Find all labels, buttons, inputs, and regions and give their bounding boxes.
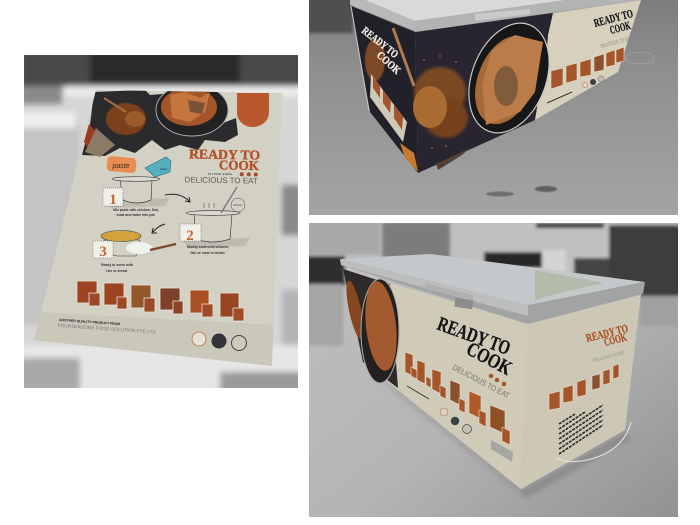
freezer floor shadow — [386, 382, 630, 498]
heading: ready to cook: DELICIOUS TO EAT — [185, 175, 258, 186]
step 3 instruction: Ready to serve with — [101, 263, 133, 267]
icon: paste packet — [106, 156, 137, 173]
icon: water jug: water — [160, 167, 167, 171]
orange tab — [237, 93, 269, 127]
dark artwork with pan — [343, 269, 401, 388]
step 1 pot — [103, 177, 170, 208]
step 1 instruction — [113, 208, 159, 217]
arrow: step 2 to 3 — [152, 224, 165, 233]
freezer end, dark side: READY TO — [359, 25, 401, 61]
heading: ready to cook: COOK — [219, 157, 260, 173]
freezer end, dark side — [351, 6, 418, 173]
step 3 bowl with rice: 3 — [99, 244, 107, 260]
step 1 instruction: Mix paste with chicken, fish, — [113, 208, 159, 212]
freezer front, cream artwork: DELICIOUS TO EAT — [600, 36, 633, 50]
blurred table background — [20, 50, 305, 395]
arrow: step 1 to 2 — [165, 194, 190, 202]
freezer end panel — [521, 294, 641, 489]
freezer long side: COOK — [463, 338, 516, 380]
freezer long side — [343, 269, 528, 489]
heading: ready to cook: READY TO — [189, 146, 260, 163]
step 3 instruction: rice or bread. — [106, 269, 128, 273]
footer pattern band — [34, 312, 274, 366]
step 2 instruction: Slowly cook until chicken, — [187, 245, 229, 249]
freezer front, cream artwork — [535, 0, 641, 120]
freezer long side: READY TO — [434, 313, 513, 360]
freezer front, dark spice artwork — [393, 13, 553, 173]
step 2 pot: 2 — [186, 228, 194, 244]
freezer long side: DELICIOUS TO EAT — [451, 363, 511, 400]
step 1 instruction: meat and water into pot. — [116, 213, 156, 217]
company credit: ANOTHER QUALITY PRODUCT FROM — [59, 318, 120, 326]
freezer end panel: COOK — [603, 332, 628, 349]
icon: water jug — [145, 157, 171, 177]
step 1 pot: 1 — [109, 192, 117, 208]
vent slots — [559, 405, 603, 454]
freezer lid — [340, 254, 645, 324]
company credit — [58, 318, 156, 334]
step 2 pot: 20 mins — [233, 203, 243, 207]
heading: ready to cook: IN 3 EASY STEPS — [208, 172, 232, 176]
panel: poster photo — [20, 50, 305, 395]
blurred room background — [305, 220, 685, 517]
poster sheet — [30, 84, 282, 370]
dark spice artwork — [82, 90, 238, 157]
step 2 instruction: fish or meat is tender. — [190, 251, 226, 255]
pan with curry — [156, 91, 228, 136]
freezer end panel: DELICIOUS TO EAT — [592, 350, 626, 364]
certification badges — [192, 332, 246, 350]
step 2 instruction — [187, 246, 229, 254]
freezer front, cream artwork: READY TO — [593, 8, 634, 30]
freezer lid — [350, 0, 641, 32]
step 3 bowl with rice — [93, 230, 176, 260]
step 2 pot — [180, 187, 250, 248]
product row — [77, 281, 244, 321]
pan with curry — [468, 22, 550, 134]
freezer end, dark side: COOK — [374, 49, 403, 77]
power cord — [556, 422, 631, 462]
freezer front, cream artwork: COOK — [609, 20, 632, 37]
heading: ready to cook — [185, 149, 260, 184]
concrete floor — [305, 0, 678, 215]
panel: freezer photo, dark front — [305, 0, 678, 215]
panel: freezer photo, cream front — [305, 220, 685, 517]
freezer end panel: READY TO — [585, 323, 629, 345]
step 3 instruction — [101, 264, 133, 272]
company credit: FOURSEASONS FOOD SOLUTION PTE LTD — [57, 323, 157, 336]
icon: paste packet: paste — [111, 163, 130, 170]
